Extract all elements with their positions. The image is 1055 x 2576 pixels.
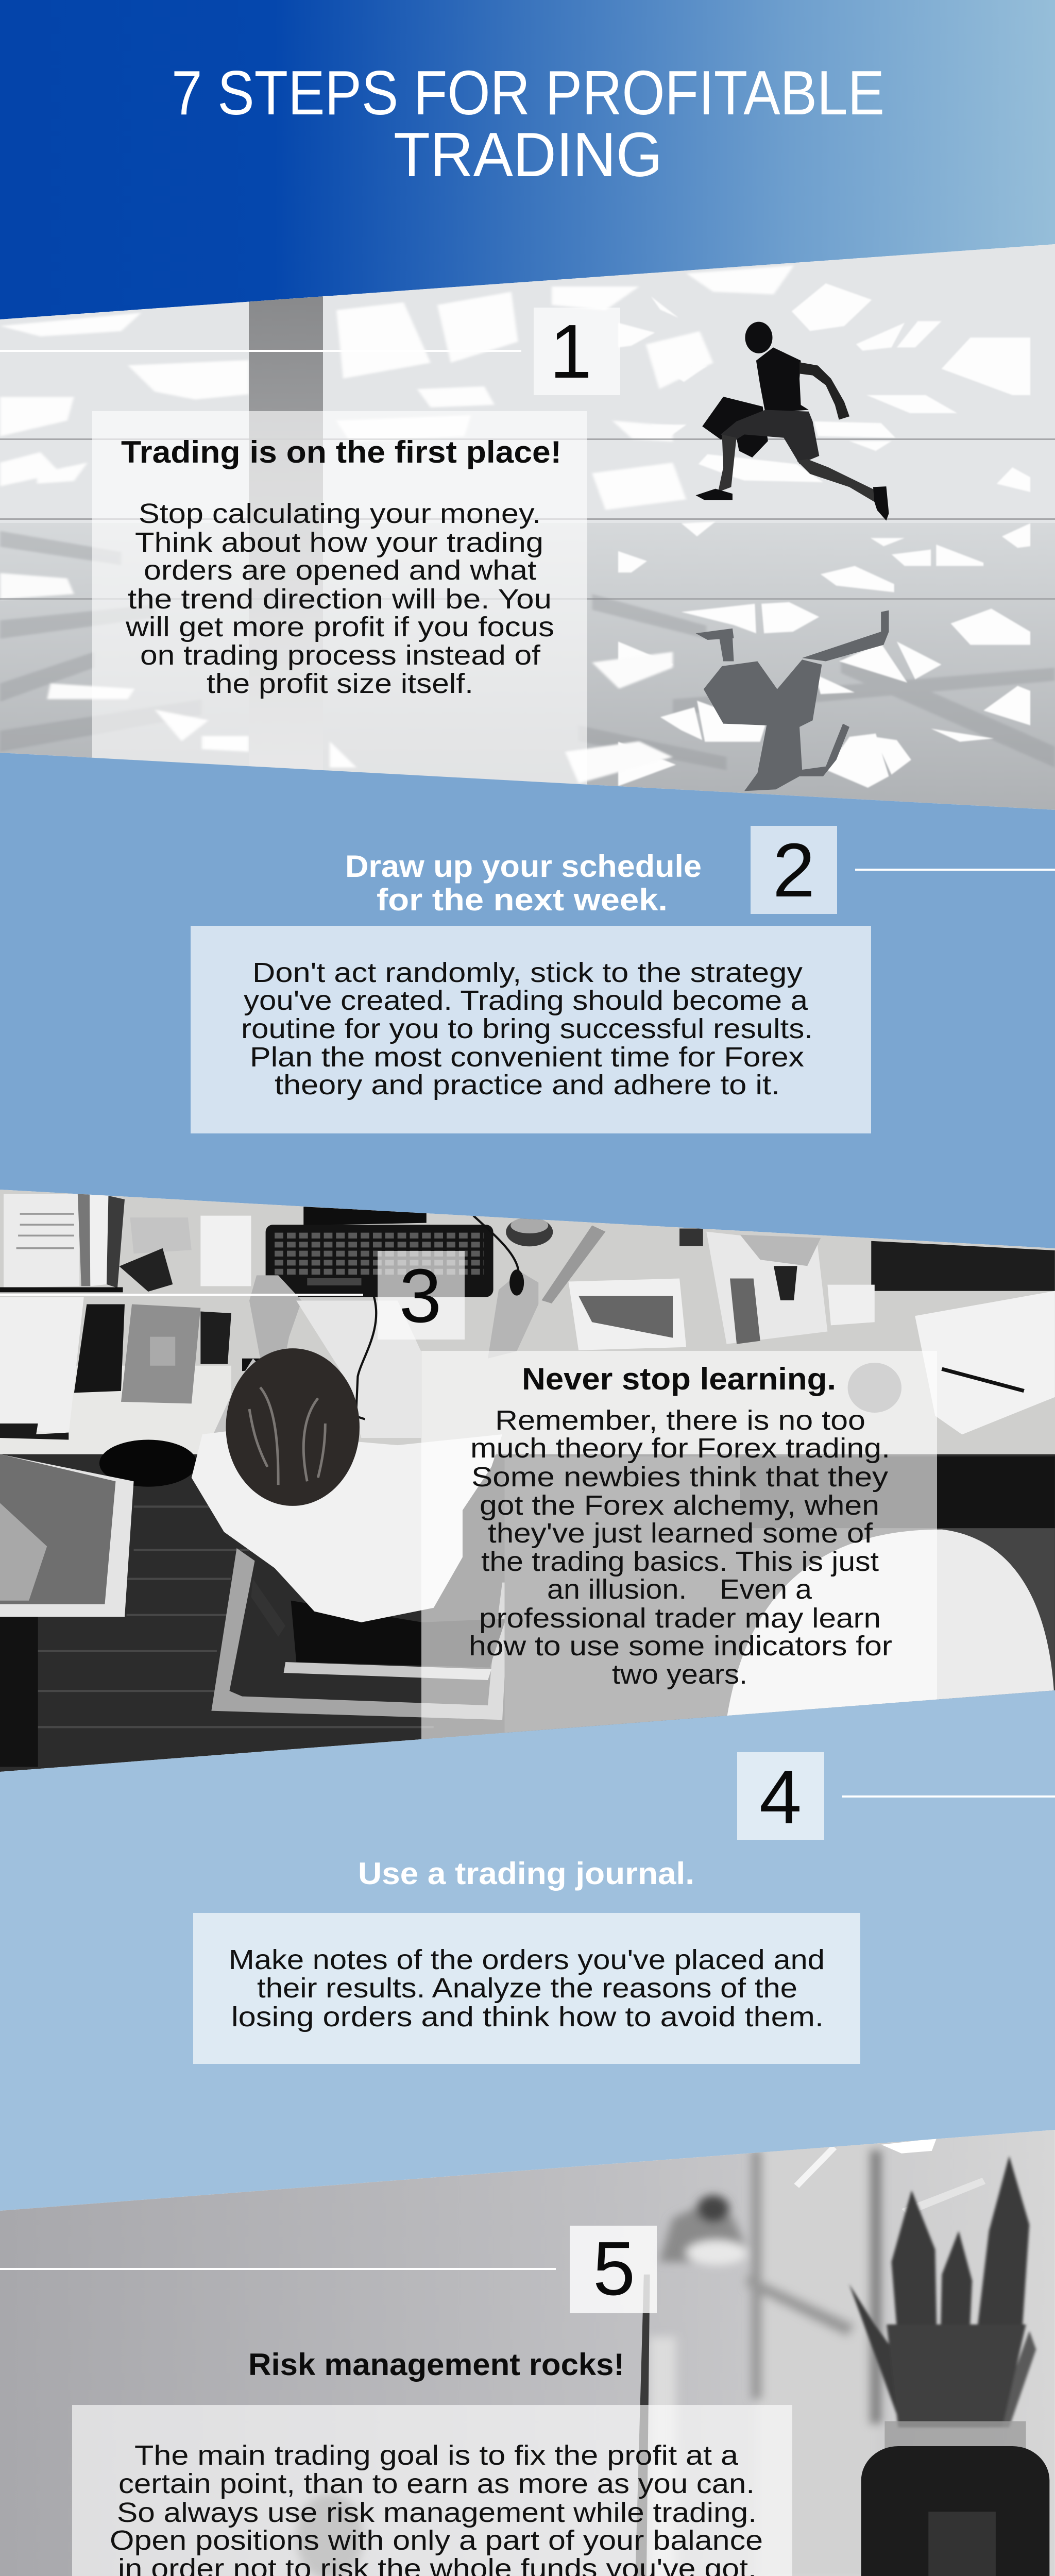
- text box 2: [191, 926, 871, 1133]
- body text 3: they've just learned some of: [488, 1518, 873, 1549]
- heading 2: [345, 849, 702, 917]
- number 2 badge: 2: [773, 828, 815, 913]
- body text 2: Don't act randomly, stick to the strategy: [252, 957, 803, 988]
- panel: step 4 background: [0, 1690, 1055, 2211]
- body text 1: orders are opened and what: [144, 555, 536, 586]
- photo: desk from above: [0, 1185, 1055, 1831]
- body text 3: two years.: [612, 1659, 747, 1690]
- body text 2: routine for you to bring successful results.: [241, 1013, 813, 1044]
- number 5 badge: [570, 2226, 657, 2313]
- heading 1: Trading is on the first place!: [121, 435, 561, 469]
- body text 2: theory and practice and adhere to it.: [275, 1070, 780, 1100]
- number 1 badge: [534, 308, 620, 395]
- text box 4: [193, 1913, 860, 2064]
- number 1 badge: 1: [550, 309, 592, 394]
- body text 5: The main trading goal is to fix the profit at a: [134, 2440, 739, 2471]
- number 5 badge: 5: [593, 2226, 635, 2311]
- heading 2: Draw up your schedule: [345, 849, 702, 884]
- body text 5: So always use risk management while trading.: [117, 2497, 757, 2528]
- body text 2: you've created. Trading should become a: [244, 985, 808, 1016]
- connector line 2: [855, 869, 1055, 871]
- body text 5: certain point, than to earn as more as you can.: [118, 2468, 755, 2499]
- body text 1: the trend direction will be. You: [128, 584, 552, 615]
- body text 4: losing orders and think how to avoid them.: [231, 2002, 824, 2032]
- body text 1: Think about how your trading: [135, 527, 543, 558]
- body text 3: much theory for Forex trading.: [470, 1433, 890, 1464]
- panel: step 1: [0, 242, 1055, 813]
- body text 3: an illusion. Even a: [547, 1574, 812, 1605]
- panel: step 3: [0, 1185, 1055, 1831]
- body text 3: [469, 1405, 892, 1690]
- title: 7 STEPS FOR PROFITABLE: [172, 58, 884, 128]
- text box 3: [421, 1351, 937, 1773]
- body text 1: on trading process instead of: [140, 640, 541, 671]
- connector line 5: [0, 2268, 556, 2270]
- body text 3: how to use some indicators for: [469, 1631, 892, 1662]
- number 2 badge: [751, 826, 837, 914]
- text box 1: [92, 411, 587, 813]
- panel: step 5: [0, 2125, 1055, 2576]
- heading 3: Never stop learning.: [522, 1362, 836, 1396]
- title: [172, 58, 884, 190]
- body text 3: Some newbies think that they: [471, 1462, 888, 1493]
- number 3 badge: 3: [399, 1253, 441, 1338]
- connector line 1: [0, 350, 521, 352]
- connector line 4: [842, 1795, 1055, 1798]
- body text 3: got the Forex alchemy, when: [480, 1490, 879, 1521]
- runner silhouette: [696, 322, 889, 520]
- body text 3: Remember, there is no too: [495, 1405, 865, 1436]
- body text 1: Stop calculating your money.: [139, 498, 541, 529]
- number 4 badge: 4: [759, 1755, 802, 1840]
- heading 2: for the next week.: [377, 883, 668, 917]
- heading 4: Use a trading journal.: [358, 1856, 694, 1891]
- panel: step 2 background: [0, 753, 1055, 1248]
- pillar: [249, 296, 323, 750]
- number 3 badge: [378, 1251, 465, 1340]
- title: TRADING: [394, 120, 662, 190]
- body text 5: [110, 2440, 763, 2576]
- body text 4: Make notes of the orders you've placed and: [229, 1944, 825, 1975]
- text box 5: [72, 2405, 792, 2576]
- photo: blurred desk with plant: [0, 2125, 1055, 2576]
- plant: [849, 2156, 1036, 2428]
- body text 4: [229, 1944, 825, 2032]
- body text 5: Open positions with only a part of your balance: [110, 2525, 763, 2556]
- photo: runner over lattice: [0, 242, 1055, 811]
- header banner: [0, 0, 1055, 319]
- body text 2: Plan the most convenient time for Forex: [250, 1042, 804, 1073]
- heading 5: Risk management rocks!: [248, 2347, 624, 2382]
- body text 1: will get more profit if you focus: [125, 612, 554, 642]
- body text 1: [125, 498, 554, 699]
- body text 4: their results. Analyze the reasons of the: [257, 1973, 797, 2004]
- connector line 3: [0, 1294, 363, 1296]
- number 4 badge: [737, 1752, 824, 1840]
- reflection of runner: [696, 611, 889, 791]
- body text 1: the profit size itself.: [207, 668, 473, 699]
- body text 2: [241, 957, 813, 1100]
- body text 3: the trading basics. This is just: [481, 1546, 879, 1577]
- body text 3: professional trader may learn: [479, 1603, 881, 1634]
